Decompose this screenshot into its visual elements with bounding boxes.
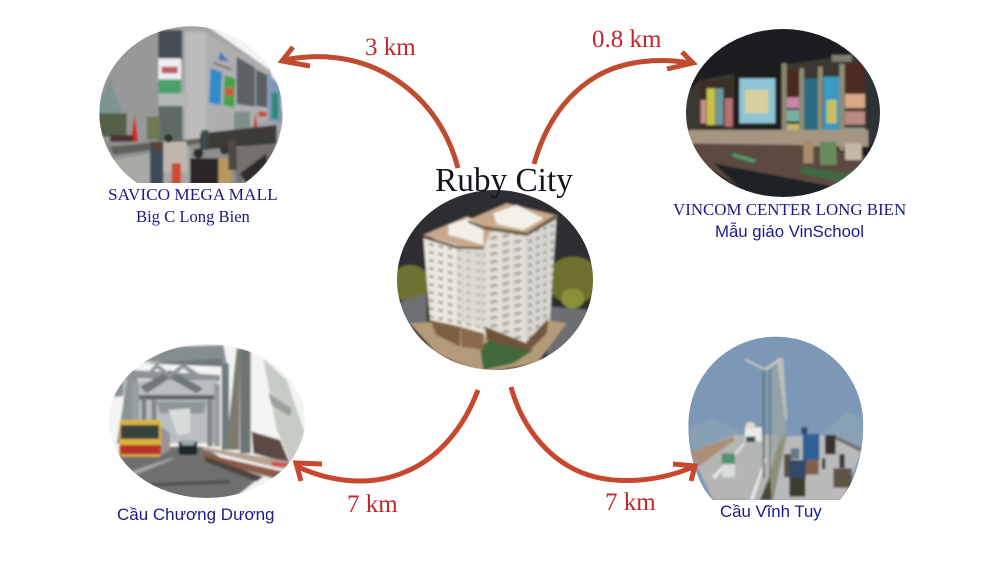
- caption: Savico Mega Mall: Big C Long Bien: [136, 207, 251, 226]
- title: Ruby City: Ruby City: [435, 162, 573, 199]
- arrow: Ruby City to Savico 3 km: [282, 47, 458, 168]
- caption: Vincom Center Long Bien: VINCOM CENTER LONG BIEN: [673, 200, 906, 219]
- caption: Vincom Center Long Bien: [673, 200, 906, 241]
- arrow: Ruby City to Vinh Tuy 7 km: [511, 387, 695, 481]
- arrow: Ruby City to Chuong Duong 7 km: [296, 390, 478, 481]
- arrow: Ruby City to Vincom 0.8 km: [534, 52, 693, 164]
- photo: Ruby City building: [390, 187, 600, 373]
- photo: Cau Chuong Duong bridge: [107, 342, 310, 502]
- caption: Vincom Center Long Bien: Mẫu giáo VinSchool: [715, 222, 864, 241]
- distance label: 7 km left: 7 km: [347, 491, 398, 518]
- photo: Savico Mega Mall: [97, 23, 287, 188]
- distance label: 3 km: 3 km: [365, 34, 416, 61]
- distance label: 0.8 km: 0.8 km: [592, 26, 662, 53]
- caption: Cau Vinh Tuy: Cầu Vĩnh Tuy: [720, 502, 822, 521]
- photo: Vincom Center Long Bien: [683, 27, 883, 200]
- caption: Savico Mega Mall: [108, 185, 278, 226]
- caption: Savico Mega Mall: SAVICO MEGA MALL: [108, 185, 278, 204]
- caption: Cau Chuong Duong: Cầu Chương Dương: [117, 505, 275, 524]
- photo: Cau Vinh Tuy bridge: [687, 335, 865, 502]
- distance label: 7 km right: 7 km: [605, 489, 656, 516]
